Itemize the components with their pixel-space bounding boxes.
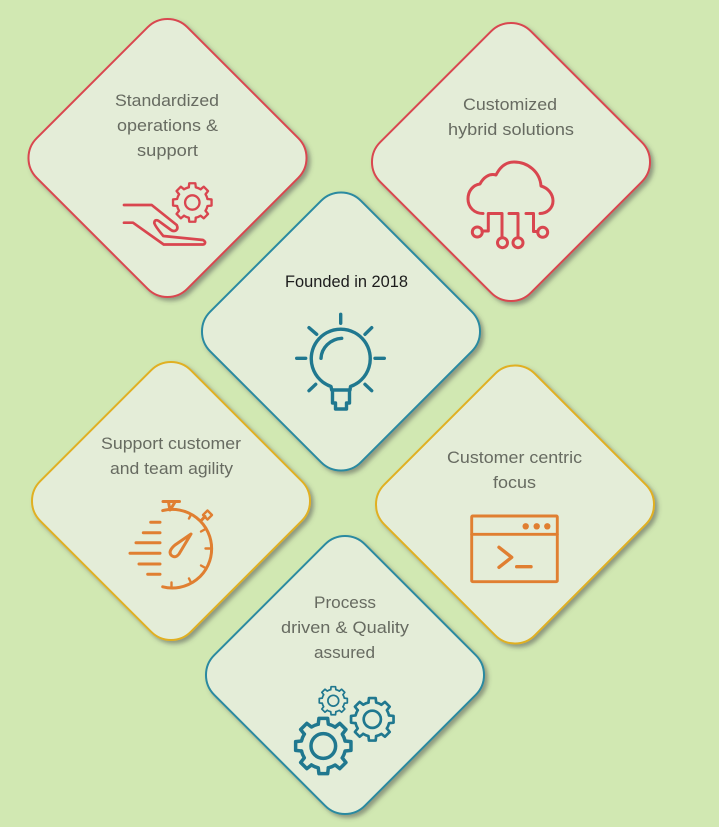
- panel: process driven and quality assured: [194, 524, 496, 826]
- icon: cloud network: [468, 162, 553, 248]
- diamond card: [17, 7, 318, 309]
- diamond card: [20, 350, 322, 652]
- diamond card: [190, 181, 492, 482]
- icon: light bulb: [297, 314, 384, 409]
- panel: founded in 2018: [190, 181, 492, 482]
- heading: support: [137, 141, 198, 160]
- heading: [447, 448, 583, 492]
- diamond card: [194, 524, 496, 826]
- heading: Standardized: [115, 91, 219, 110]
- heading: driven & Quality: [281, 618, 410, 637]
- diamond card: [364, 354, 666, 655]
- heading: Customized: [463, 95, 557, 114]
- heading: [448, 95, 574, 139]
- icon: terminal window: [472, 516, 557, 582]
- heading: operations &: [117, 116, 219, 135]
- heading: [281, 593, 410, 662]
- heading: Support customer: [101, 434, 241, 453]
- heading: Customer centric: [447, 448, 583, 467]
- diamond card: [360, 11, 662, 313]
- heading: Process: [314, 593, 376, 612]
- heading: focus: [493, 473, 536, 492]
- heading: Founded in 2018: [285, 272, 408, 291]
- panel: customer centric focus: [364, 354, 666, 655]
- panel: customized hybrid solutions: [360, 11, 662, 313]
- icon: hand holding gear: [124, 183, 212, 244]
- heading: hybrid solutions: [448, 120, 574, 139]
- panel: support customer and team agility: [20, 350, 322, 652]
- icon: stopwatch: [130, 502, 212, 588]
- panel: standardized operations and support: [17, 7, 318, 309]
- icon: three gears: [295, 687, 394, 774]
- heading: [101, 434, 241, 478]
- heading: and team agility: [110, 459, 234, 478]
- heading: assured: [314, 643, 375, 662]
- heading: [115, 91, 219, 160]
